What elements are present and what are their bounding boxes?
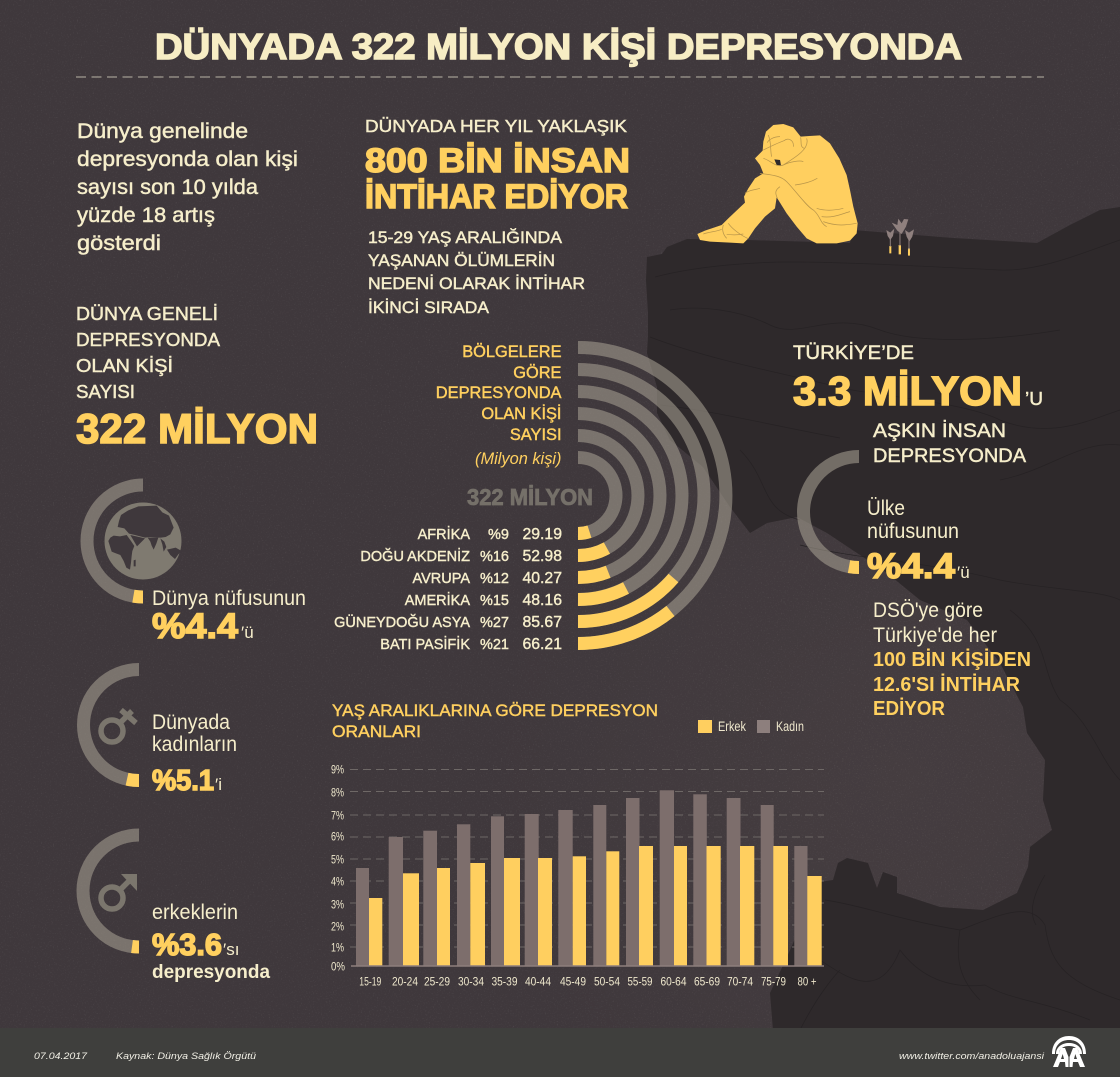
text: women share: %5.1 <box>152 765 214 797</box>
x axis labels: 30-34 <box>458 974 484 988</box>
x axis labels <box>359 974 816 988</box>
panel: women <box>84 670 237 797</box>
panel: Türkiye <box>793 343 1043 720</box>
legend: Erkek <box>718 718 747 734</box>
text: suicide statistics: 800 BİN İNSAN <box>365 142 630 180</box>
x axis labels: 80 + <box>798 974 816 988</box>
text: women share: kadınların <box>152 733 237 756</box>
text: suicide statistics: DÜNYADA HER YIL YAKLAŞIK <box>365 116 627 136</box>
date: 07.04.2017 <box>34 1051 88 1062</box>
x axis labels: 50-54 <box>594 974 620 988</box>
text: Türkiye headline: AŞKIN İNSAN <box>873 421 1006 442</box>
table: regions: BATI PASİFİK <box>380 635 470 653</box>
panel: men <box>83 835 270 983</box>
text: world total: SAYISI <box>76 382 135 402</box>
bars: women <box>356 790 808 966</box>
legend <box>698 718 804 734</box>
text: men share <box>152 901 270 983</box>
text: ten year increase: gösterdi <box>77 232 161 255</box>
x axis labels: 35-39 <box>492 974 518 988</box>
table: regions: %16 <box>480 549 509 565</box>
y axis labels: 5% <box>331 852 344 866</box>
text: men share: erkeklerin <box>152 901 238 924</box>
ring gauge <box>84 670 139 781</box>
x axis labels: 65-69 <box>694 974 720 988</box>
text: Türkiye headline <box>793 343 1043 467</box>
table: regions: %9 <box>488 527 509 543</box>
text: world total: DÜNYA GENELİ <box>76 304 218 324</box>
y axis labels: 3% <box>331 898 344 912</box>
text: national share: ′ü <box>957 563 970 582</box>
cliff silhouette <box>646 207 1120 1030</box>
y axis labels: 1% <box>331 940 344 954</box>
text: WHO suicide rate: DSÖ'ye göre <box>873 599 983 622</box>
y axis labels <box>331 762 345 974</box>
title: DÜNYADA 322 MİLYON KİŞİ DEPRESYONDA <box>155 26 962 67</box>
table: regions: AFRİKA <box>418 525 470 543</box>
text: Türkiye headline: DEPRESYONDA <box>873 446 1026 467</box>
x axis labels: 25-29 <box>424 974 450 988</box>
text: Türkiye headline: TÜRKİYE’DE <box>793 343 914 364</box>
table: regions: 40.27 <box>522 570 562 587</box>
text: ten year increase: yüzde 18 artış <box>77 204 215 227</box>
table: regions: 85.67 <box>522 614 562 631</box>
x axis labels: 75-79 <box>761 974 786 988</box>
icon: globe <box>104 502 182 580</box>
table: regions: 29.19 <box>522 526 562 543</box>
text: national share <box>867 497 970 586</box>
text: women share: ′i <box>215 775 222 794</box>
table: regions <box>334 525 562 653</box>
table: regions: %15 <box>480 593 509 609</box>
icon: male symbol <box>101 874 137 909</box>
x axis labels: 40-44 <box>525 974 551 988</box>
source: Kaynak: Dünya Sağlık Örgütü <box>116 1051 257 1062</box>
text: women share <box>152 711 237 797</box>
footer bar <box>0 1028 1120 1077</box>
heading: regional chart: BÖLGELERE <box>462 343 562 361</box>
table: regions: 52.98 <box>522 548 562 565</box>
text: ten year increase <box>77 120 298 255</box>
text: world share: %4.4 <box>152 607 239 646</box>
y axis labels: 2% <box>331 920 344 934</box>
x axis labels: 55-59 <box>628 974 653 988</box>
y axis labels: 8% <box>331 786 344 800</box>
text: men share: %3.6 <box>152 927 222 962</box>
text: national share: nüfusunun <box>867 520 959 543</box>
ring gauge <box>804 456 859 568</box>
table: regions: %12 <box>480 571 509 587</box>
table: regions: AMERİKA <box>405 591 470 609</box>
text: suicide statistics: NEDENİ OLARAK İNTİHAR <box>368 274 585 293</box>
ring gauge <box>87 485 143 597</box>
figure: person sitting <box>697 124 858 243</box>
text: WHO suicide rate: Türkiye'de her <box>873 624 997 647</box>
text: national share: Ülke <box>867 497 905 520</box>
table: regions: 66.21 <box>522 636 562 653</box>
text: world total: DEPRESYONDA <box>76 330 220 350</box>
text: WHO suicide rate: 12.6'SI İNTİHAR <box>873 673 1021 696</box>
chart heading: YAŞ ARALIKLARINA GÖRE DEPRESYON <box>332 701 658 720</box>
heading: regional chart: SAYISI <box>510 426 562 444</box>
text: ten year increase: Dünya genelinde <box>77 120 248 143</box>
x axis labels: 60-64 <box>660 974 687 988</box>
text: world total: 322 MİLYON <box>76 405 318 452</box>
table: regions: %21 <box>480 637 509 653</box>
chart heading <box>332 701 658 741</box>
ring gauge <box>83 835 139 947</box>
text: suicide statistics: İKİNCİ SIRADA <box>368 298 489 317</box>
heading: regional chart: GÖRE <box>513 364 562 382</box>
y axis labels: 4% <box>331 874 344 888</box>
text: WHO suicide rate <box>873 599 1031 720</box>
heading: regional chart: OLAN KİŞİ <box>481 404 562 423</box>
table: regions: %27 <box>480 615 509 631</box>
x axis labels: 15-19 <box>359 974 382 988</box>
y axis labels: 6% <box>331 830 344 844</box>
total label: 322 MİLYON <box>467 484 593 510</box>
text: suicide statistics: 15-29 YAŞ ARALIĞINDA <box>368 228 562 247</box>
bar chart: depression by age <box>331 701 824 988</box>
text: world total: OLAN KİŞİ <box>76 356 173 376</box>
chart heading: ORANLARI <box>332 722 421 741</box>
social link: www.twitter.com/anadoluajansi <box>899 1051 1045 1062</box>
text: men share: ′sı <box>223 940 239 959</box>
x axis labels: 45-49 <box>560 974 586 988</box>
icon: female symbol <box>101 710 136 742</box>
rings: gray tracks <box>578 348 726 644</box>
table: regions: AVRUPA <box>413 571 470 587</box>
text: WHO suicide rate: EDİYOR <box>873 697 946 720</box>
y axis labels: 0% <box>331 960 345 974</box>
legend: Kadın <box>776 718 804 734</box>
text: ten year increase: depresyonda olan kişi <box>77 148 298 171</box>
panel: world population <box>87 485 306 646</box>
text: suicide statistics: YAŞANAN ÖLÜMLERİN <box>368 251 555 270</box>
table: regions: DOĞU AKDENİZ <box>360 547 470 565</box>
icon: crocus flowers <box>886 219 914 256</box>
text: men share: depresyonda <box>152 961 270 983</box>
text: world share: ′ü <box>241 623 254 642</box>
text: Türkiye headline: ’U <box>1025 389 1043 409</box>
table: regions: 48.16 <box>522 592 562 609</box>
text: suicide statistics: İNTİHAR EDİYOR <box>365 178 628 216</box>
text: suicide statistics <box>365 116 630 317</box>
heading: regional chart: DEPRESYONDA <box>436 384 562 402</box>
bars: men <box>369 846 822 966</box>
table: regions: GÜNEYDOĞU ASYA <box>334 613 470 631</box>
semicircle chart: depression by region <box>334 343 726 653</box>
y axis labels: 9% <box>331 762 344 776</box>
rings: yellow shares <box>578 532 674 644</box>
text: world total <box>76 304 318 452</box>
text: women share: Dünyada <box>152 711 230 734</box>
text: world share: Dünya nüfusunun <box>152 587 306 610</box>
y axis labels: 7% <box>331 808 344 822</box>
text: WHO suicide rate: 100 BİN KİŞİDEN <box>873 648 1031 671</box>
icon: agency logo <box>1052 1036 1086 1067</box>
heading: regional chart <box>436 343 562 468</box>
x axis labels: 20-24 <box>392 974 418 988</box>
heading: regional chart: (Milyon kişi) <box>475 450 562 468</box>
text: national share: %4.4 <box>867 547 956 586</box>
text: Türkiye headline: 3.3 MİLYON <box>793 368 1022 414</box>
text: ten year increase: sayısı son 10 yılda <box>77 176 258 199</box>
x axis labels: 70-74 <box>727 974 753 988</box>
text: world share <box>152 587 306 646</box>
